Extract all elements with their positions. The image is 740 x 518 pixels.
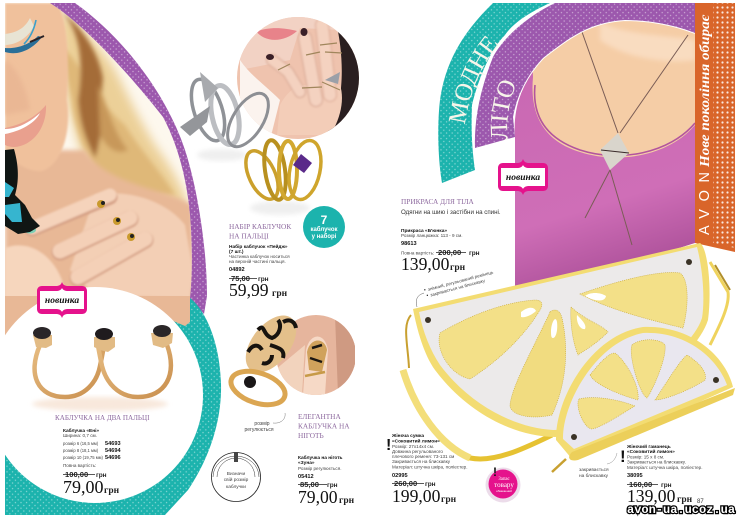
price: body jewelry: грн (450, 263, 466, 273)
note: adjustable size: розмір (254, 421, 270, 427)
hand and fingers (6, 188, 192, 296)
price: bag: 260,00 (394, 479, 417, 488)
teal arc: МОДНЕ (438, 3, 550, 183)
text block: body jewelry: Повна вартість: (401, 250, 434, 256)
price: double-finger ring: 100,00 (65, 470, 88, 479)
badge: 7 rings in the set: 7 (321, 213, 328, 227)
text block: ring set: Набір каблучок «Пейдж» (229, 243, 288, 250)
icon: ring sizer: каблучки (226, 484, 246, 490)
text block: purse: 38095 (627, 473, 643, 479)
note: bag strap features (423, 268, 496, 299)
white circle panel (0, 287, 203, 503)
product: double-finger ring (32, 325, 173, 411)
white edge of neckline arc (513, 20, 695, 117)
price: double-finger ring: грн (96, 472, 107, 479)
skin patch covering upper teal (5, 290, 190, 340)
price: purse: грн (661, 482, 672, 489)
watermark: avon-ua.ucoz.ua (627, 503, 735, 517)
price: purse (627, 480, 693, 506)
text block: ring details: розмір 8 (18,1 мм) (63, 448, 99, 453)
text block: body jewelry: Прикраса «Б'юнка» (401, 228, 447, 234)
price: body jewelry: грн (469, 250, 480, 257)
orange side band with slogan: AVON (697, 172, 713, 235)
price: purse: 139,00 (627, 486, 676, 506)
photo: woman's chest and magenta top with pendant (514, 21, 695, 286)
text block: body jewelry: Одягни на шию і застібни на спині. (401, 209, 501, 216)
heading: елегантна каблучка на ніготь (298, 412, 350, 440)
text block: body jewelry: Розмір ланцюжка: 113 - 9 см. (401, 233, 463, 238)
price: purse: 160,00 (629, 480, 652, 489)
price: body jewelry: 139,00 (401, 254, 450, 274)
heading: набір каблучок: НА ПАЛЬЦІ (229, 232, 269, 240)
text block: nail ring (298, 454, 343, 480)
badge: limited stock: товару (494, 481, 514, 489)
purple arc: ЛІТО (474, 3, 695, 148)
price: ring set: 59,99 (229, 280, 269, 300)
orange side band with slogan (695, 3, 735, 252)
heading: каблучка на два пальці: КАБЛУЧКА НА ДВА ПАЛЬЦІ (55, 414, 150, 422)
price: bag (392, 479, 457, 506)
text block: bag: Жіноча сумка (391, 433, 424, 439)
badge: новинка (right): новинка (506, 173, 540, 183)
price: ring set: грн (272, 289, 288, 299)
price: body jewelry (401, 248, 480, 274)
note: closes with zipper: на блискавку (579, 473, 609, 479)
butterfly (5, 149, 40, 234)
text block: body jewelry: 98613 (401, 241, 417, 247)
text block: purse: Розмір: 15 x 8 см. (627, 454, 664, 460)
price: nail ring: грн (339, 496, 355, 506)
note: adjustable size: регулюється (244, 427, 274, 433)
purple arc band, left page (50, 3, 207, 314)
text block: bag: 02995 (392, 473, 408, 479)
heading: набір каблучок: НАБІР КАБЛУЧОК (229, 222, 291, 231)
teal arc: МОДНЕ: МОДНЕ (448, 36, 498, 124)
product: lemon slice bag with strap (403, 243, 730, 459)
text block: ring details: Повна вартість: (63, 463, 96, 468)
text block: bag: Розмір: 27x14x4 см. (392, 444, 434, 449)
text block: ring set: на верхній частині пальця. (229, 258, 286, 264)
lips (5, 105, 46, 147)
badge: 7 rings in the set: у наборі (312, 233, 337, 240)
text block: bag: ! (386, 437, 391, 454)
badge: новинка (left) (37, 282, 87, 318)
text block: purse: Закривається на блискавку. (627, 460, 686, 464)
heading: елегантна каблучка на ніготь: КАБЛУЧКА НА (298, 422, 350, 430)
icon: ring sizer: свій розмір (224, 476, 249, 483)
price: ring set (229, 274, 288, 300)
text block: bag: Матеріал: штучна шкіра, поліестер. (392, 464, 468, 470)
badge: новинка (left): новинка (45, 296, 79, 306)
badge: limited stock: обмежений (496, 489, 512, 493)
photo: hand with rings (circle) (235, 15, 362, 140)
text block: bag: Довжина регульованого (392, 449, 443, 454)
price: nail ring: 79,00 (298, 487, 338, 507)
badge: 7 rings in the set (303, 206, 345, 248)
price: bag: грн (425, 481, 436, 488)
text block: ring set: 04892 (229, 267, 245, 273)
text block: purse: Матеріал: штучна шкіра, поліестер. (627, 465, 703, 470)
teal ring around ring product (0, 295, 225, 518)
note: bag strap features: закривається на блискавку (430, 278, 486, 297)
text block: ring details: Каблучка «Ені» (63, 427, 99, 434)
text block: purse: ! (620, 447, 626, 466)
text block: nail ring: Каблучка на ніготь (298, 454, 343, 461)
text block: ring details: 54694 (105, 448, 121, 454)
price: double-finger ring: 79,00 (63, 477, 104, 497)
price: nail ring (298, 480, 355, 507)
text block: purse (620, 443, 703, 479)
purple arc: ЛІТО: ЛІТО (490, 80, 514, 140)
badge: limited stock: ! (493, 465, 497, 479)
product: nail ring (227, 306, 306, 411)
note: closes with zipper (579, 453, 617, 479)
price: double-finger ring (63, 470, 120, 497)
product: silver rings (180, 72, 277, 161)
page number: 87 (697, 499, 704, 505)
text block: nail ring: «Зуна» (298, 460, 315, 466)
text block: ring set: (7 шт.) (229, 249, 244, 255)
badge: новинка (right) (498, 159, 548, 195)
price: bag: 199,00 (392, 486, 441, 506)
note: adjustable size (244, 413, 285, 433)
icon: ring sizer: Визначи (227, 471, 246, 477)
text block: ring details (63, 427, 121, 468)
text block: ring details: Ширина: 0,7 см. (63, 433, 97, 438)
photo: nail ring on finger (circle) (275, 315, 355, 395)
note: bag strap features: знімний, регульований ремінець (427, 268, 494, 292)
text block: bag: Закривається на блискавку (392, 459, 451, 464)
text block: ring details: розмір 6 (16,5 мм) (63, 441, 99, 446)
text block: nail ring: 05412 (298, 474, 314, 480)
heading: елегантна каблучка на ніготь: ЕЛЕГАНТНА (298, 412, 341, 421)
text block: body jewelry (401, 209, 501, 256)
badge: limited stock: Запас (498, 477, 510, 482)
price: body jewelry: 200,00 (438, 248, 461, 257)
product: lemon slice purse (552, 327, 735, 472)
text block: nail ring: Розмір регулюється. (298, 466, 342, 471)
text block: ring details: 54696 (105, 455, 121, 461)
price: nail ring: грн (327, 482, 338, 489)
panel: woman portrait photo (5, 3, 192, 296)
price: bag: грн (441, 495, 457, 505)
text block: purse: «Соковитий лимон» (627, 448, 675, 455)
icon: ring sizer (212, 452, 260, 502)
text block: ring details: 54693 (105, 441, 121, 447)
text block: ring set (229, 243, 290, 273)
heading: елегантна каблучка на ніготь: НІГОТЬ (298, 431, 324, 440)
price: ring set: грн (258, 276, 269, 283)
text block: ring set: Частинка каблучок носиться (229, 254, 290, 259)
note: closes with zipper: закривається (579, 468, 609, 473)
nail (26, 228, 36, 234)
text block: bag (386, 433, 468, 479)
price: nail ring: 85,00 (300, 480, 319, 489)
heading: прикраса для тіла: ПРИКРАСА ДЛЯ ТІЛА (401, 197, 475, 206)
rings on fingers (97, 200, 135, 241)
eye make-up (5, 18, 44, 53)
badge: limited stock (486, 465, 520, 502)
heading: набір каблучок (229, 222, 291, 240)
text block: bag: плечового ременя: 73-131 см (392, 454, 454, 459)
price: double-finger ring: грн (104, 486, 120, 496)
badge: 7 rings in the set: каблучок (310, 226, 338, 233)
orange side band with slogan: Нове покоління обирає (697, 15, 712, 168)
text block: bag: «Соковитий лимон» (392, 438, 440, 444)
price: ring set: 75,00 (231, 274, 250, 283)
product: gold rings with purple stone (239, 138, 326, 215)
text block: purse: Жіночий гаманець (626, 443, 671, 450)
text block: ring details: розмір 10 (19,75 мм) (63, 455, 103, 460)
price: purse: грн (677, 495, 693, 505)
